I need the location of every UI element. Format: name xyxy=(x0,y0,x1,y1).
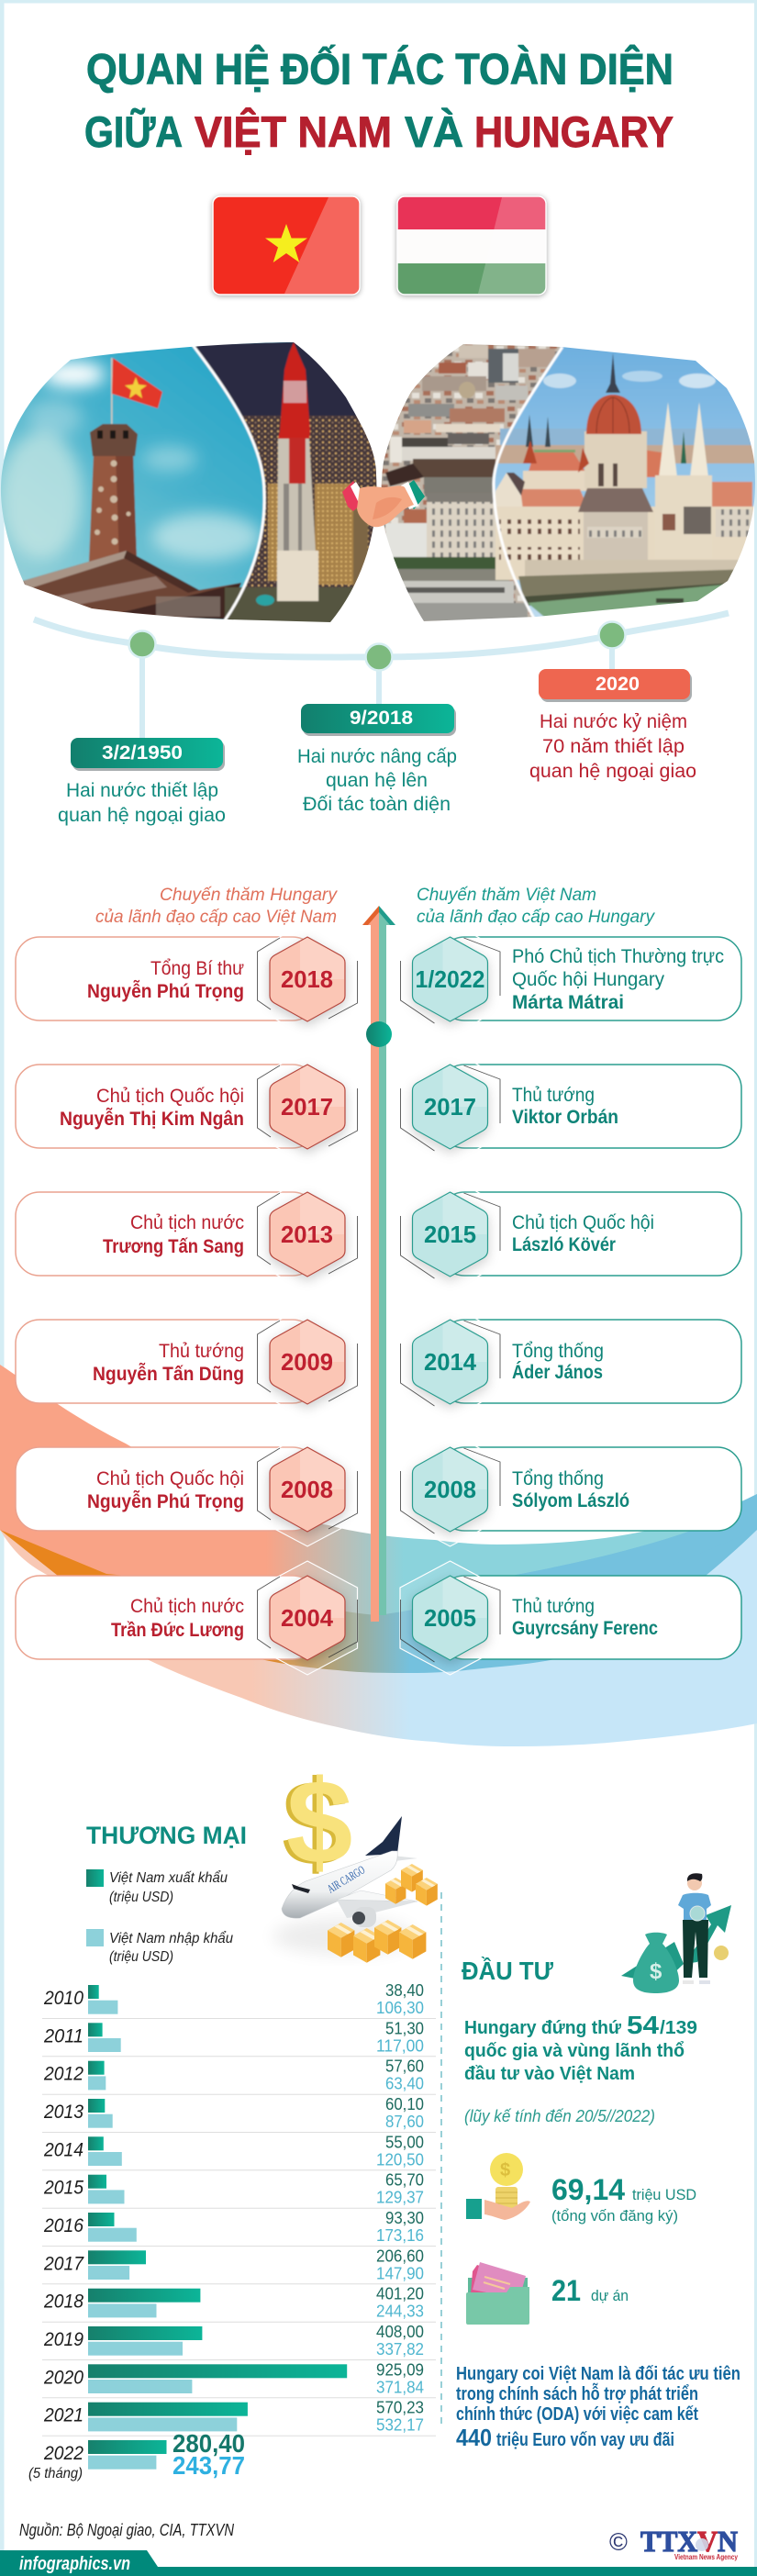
year labels xyxy=(28,1988,84,2481)
year labels: 2012 xyxy=(43,2064,83,2085)
left column heading: của lãnh đạo cấp cao Việt Nam xyxy=(95,907,337,927)
ODA text: triệu Euro vốn vay ưu đãi xyxy=(496,2430,674,2450)
visit card: Việt Nam 2009: Nguyễn Tấn Dũng xyxy=(93,1363,244,1385)
investment ranking text xyxy=(464,2011,697,2084)
export values: 401,20 xyxy=(376,2284,424,2303)
import values: 63,40 xyxy=(385,2074,424,2093)
visit card: Hungary 1/2022: Márta Mátrai xyxy=(512,992,624,1013)
year labels: 2010 xyxy=(43,1988,83,2009)
investment ranking text: 54 xyxy=(627,2011,659,2039)
year labels: 2022 xyxy=(43,2443,83,2464)
icon: dollar sign and cargo plane: $ xyxy=(282,1756,349,1890)
visit card: Việt Nam 2009: 2009 xyxy=(281,1348,333,1376)
export values: 38,40 xyxy=(385,1980,424,2000)
2022 highlighted values: 243,77 xyxy=(173,2451,245,2480)
row separators xyxy=(42,2019,436,2436)
right column heading xyxy=(417,885,655,927)
left column heading: Chuyến thăm Hungary xyxy=(160,885,338,905)
title: HUNGARY xyxy=(474,107,674,156)
right column heading: Chuyến thăm Việt Nam xyxy=(417,885,596,905)
visit card: Hungary 2017: 2017 xyxy=(424,1093,476,1121)
title: VÀ xyxy=(405,107,463,156)
milestone 9/2018: Đối tác toàn diện xyxy=(303,794,451,815)
chevron arrow axis xyxy=(362,906,395,1622)
year labels: 2020 xyxy=(43,2367,83,2388)
milestone node 2020 xyxy=(598,622,626,648)
visit card: Hungary 1/2022: Phó Chủ tịch Thường trực xyxy=(512,946,724,967)
visit card: Hungary 2005: Thủ tướng xyxy=(512,1596,595,1617)
visit card: Việt Nam 2004: Trần Đức Lương xyxy=(111,1620,244,1641)
night city xyxy=(195,342,376,622)
logo: TTXVN: © xyxy=(609,2528,628,2556)
boxes xyxy=(328,1864,438,1963)
bar chart: trade by year xyxy=(28,1980,436,2481)
stat: registered capital xyxy=(551,2173,696,2225)
background wave: dark blue right xyxy=(512,1494,757,1615)
Budapest city blocks xyxy=(381,345,555,621)
milestone 3/2/1950: quan hệ ngoại giao xyxy=(58,805,226,826)
visit card: Hungary 2014: 2014 xyxy=(424,1348,477,1376)
ODA text: chính thức (ODA) với việc cam kết xyxy=(456,2404,698,2425)
stat: registered capital: 69,14 xyxy=(551,2173,625,2206)
logo: TTXVN: Vietnam News Agency xyxy=(674,2552,738,2561)
import values xyxy=(376,1998,424,2435)
ODA text: trong chính sách hỗ trợ phát triển xyxy=(456,2382,698,2404)
footer bar xyxy=(0,2550,757,2576)
visit card: Việt Nam 2013: Chủ tịch nước xyxy=(130,1212,244,1233)
visit card: Việt Nam 2008: Nguyễn Phú Trọng xyxy=(87,1490,244,1512)
title xyxy=(84,44,674,156)
milestone 2020: quan hệ ngoại giao xyxy=(529,761,696,782)
background wave: salmon to teal band xyxy=(0,1365,757,1615)
milestone node 2018 xyxy=(365,644,393,670)
year labels: 2013 xyxy=(43,2102,83,2123)
logo: TTXVN xyxy=(609,2525,738,2561)
photo: Budapest parliament and city xyxy=(376,340,757,633)
timeline xyxy=(34,613,729,740)
milestone 2020 xyxy=(529,669,696,782)
year labels: 2014 xyxy=(43,2139,83,2160)
icon: Vietnam flag xyxy=(213,196,360,295)
visit card: Việt Nam 2004 xyxy=(16,1561,358,1675)
milestone 9/2018 xyxy=(297,704,457,815)
visit card: Việt Nam 2009: Thủ tướng xyxy=(159,1341,244,1362)
stat: registered capital: (tổng vốn đăng ký) xyxy=(551,2207,678,2225)
visit card: Việt Nam 2013: 2013 xyxy=(281,1221,333,1248)
visit card: Hungary 2008: Sólyom László xyxy=(512,1490,629,1511)
milestone 2020: 70 năm thiết lập xyxy=(542,736,685,757)
visit card: Hungary 2014 xyxy=(400,1305,741,1419)
visit card: Hungary 2005 xyxy=(400,1561,741,1675)
icon: folder xyxy=(466,2262,529,2325)
legend: Việt Nam xuất khẩu xyxy=(109,1869,228,1886)
bars exports xyxy=(88,1985,347,2454)
visit card: Hungary 2005: Guyrcsány Ferenc xyxy=(512,1618,658,1639)
export values: 60,10 xyxy=(385,2094,424,2113)
investment ranking text: đầu tư vào Việt Nam xyxy=(464,2064,635,2084)
year labels: 2016 xyxy=(43,2215,83,2236)
visit card: Việt Nam 2008: Chủ tịch Quốc hội xyxy=(96,1468,244,1489)
axis node xyxy=(366,1021,392,1047)
milestone 3/2/1950 xyxy=(58,738,226,826)
visit card: Hungary 1/2022: Quốc hội Hungary xyxy=(512,969,664,990)
year labels: 2019 xyxy=(43,2329,83,2350)
title: QUAN HỆ ĐỐI TÁC TOÀN DIỆN xyxy=(86,44,674,94)
export values: 570,23 xyxy=(376,2398,424,2417)
visit card: Việt Nam 2017: Nguyễn Thị Kim Ngân xyxy=(60,1108,244,1130)
milestone 2020: Hai nước kỷ niệm xyxy=(540,711,687,732)
legend: Việt Nam nhập khẩu xyxy=(109,1930,233,1946)
white arc divider xyxy=(193,345,264,620)
icon: dollar sign and cargo plane xyxy=(273,1755,438,1963)
export values: 55,00 xyxy=(385,2132,424,2151)
flag tower xyxy=(89,424,138,562)
export values: 57,60 xyxy=(385,2057,424,2076)
year labels: 2021 xyxy=(43,2405,83,2426)
visit card: Hungary 2015: 2015 xyxy=(424,1221,476,1248)
export values xyxy=(376,1980,424,2417)
visit card: Hungary 2014: Tổng thống xyxy=(512,1341,604,1362)
year labels: 2017 xyxy=(43,2253,84,2274)
left column heading xyxy=(95,885,338,927)
visit card: Việt Nam 2008 xyxy=(16,1433,358,1546)
visit card: Việt Nam 2004: Chủ tịch nước xyxy=(130,1596,244,1617)
visit card: Hungary 2015: Chủ tịch Quốc hội xyxy=(512,1212,654,1233)
stat: projects: 21 xyxy=(551,2274,581,2307)
icon: dollar sign and cargo plane: AIR CARGO xyxy=(325,1863,367,1896)
milestone 2020: 2020 xyxy=(596,674,640,695)
import values: 244,33 xyxy=(376,2302,424,2321)
milestone 3/2/1950: Hai nước thiết lập xyxy=(66,780,218,801)
investment ranking text: /139 xyxy=(660,2018,697,2038)
footer bar: infographics.vn xyxy=(19,2554,130,2574)
visit card: Việt Nam 2017 xyxy=(16,1050,358,1164)
legend xyxy=(86,1869,233,1965)
year labels: 2018 xyxy=(43,2292,83,2313)
visit card: Việt Nam 2004: 2004 xyxy=(281,1604,334,1632)
legend: (triệu USD) xyxy=(109,1890,173,1905)
visit card: Hungary 1/2022: 1/2022 xyxy=(415,965,484,993)
logo: TTXVN: TTXVN xyxy=(640,2525,738,2558)
title: GIỮA xyxy=(84,107,183,156)
ODA text: 440 xyxy=(456,2424,492,2451)
icon: investor with money bag xyxy=(621,1873,731,1993)
bars imports xyxy=(88,2001,237,2470)
milestone 3/2/1950: 3/2/1950 xyxy=(102,742,183,764)
clouds xyxy=(0,362,262,561)
2022 highlighted values: 280,40 xyxy=(173,2429,245,2458)
flag xyxy=(111,358,162,424)
background wave: orange to blue band xyxy=(0,1432,757,1673)
title: VIỆT NAM xyxy=(195,107,392,156)
heading: investment: ĐẦU TƯ xyxy=(462,1957,554,1985)
import values: 337,82 xyxy=(376,2339,424,2359)
export values: 51,30 xyxy=(385,2018,424,2037)
visit card: Việt Nam 2013: Trương Tấn Sang xyxy=(103,1236,244,1257)
visit card: Hungary 2017: Viktor Orbán xyxy=(512,1107,618,1128)
visit card: Việt Nam 2018: 2018 xyxy=(281,965,333,993)
visit card: Việt Nam 2018 xyxy=(16,922,358,1036)
white arc divider xyxy=(494,347,562,619)
visit card: Hungary 2017: Thủ tướng xyxy=(512,1085,595,1106)
export values: 65,70 xyxy=(385,2170,424,2190)
import values: 117,00 xyxy=(376,2035,424,2055)
icon: hand holding coin: $ xyxy=(500,2160,510,2180)
ODA text xyxy=(456,2364,740,2451)
milestone 9/2018: quan hệ lên xyxy=(326,770,428,791)
legend: (triệu USD) xyxy=(109,1949,173,1965)
export values: 206,60 xyxy=(376,2246,424,2265)
visit card: Hungary 2008 xyxy=(400,1433,741,1546)
visit card: Hungary 2017 xyxy=(400,1050,741,1164)
visit card: Hungary 2008: 2008 xyxy=(424,1476,476,1503)
year labels: 2011 xyxy=(43,2025,83,2046)
visit card: Hungary 1/2022 xyxy=(400,922,741,1036)
visit card: Việt Nam 2013 xyxy=(16,1177,358,1291)
visit card: Việt Nam 2017: 2017 xyxy=(281,1093,333,1121)
stat: projects: dự án xyxy=(591,2287,629,2304)
import values: 371,84 xyxy=(376,2377,424,2396)
visit card: Hungary 2015: László Kövér xyxy=(512,1234,616,1255)
investment ranking text: quốc gia và vùng lãnh thổ xyxy=(464,2041,685,2061)
visit card: Việt Nam 2009 xyxy=(16,1305,358,1419)
visit card: Hungary 2015 xyxy=(400,1177,741,1291)
visit card: Việt Nam 2018: Nguyễn Phú Trọng xyxy=(87,980,244,1002)
icon: investor with money bag: $ xyxy=(650,1959,662,1984)
investment ranking text: Hungary đứng thứ xyxy=(464,2018,621,2038)
heading: trade: THƯƠNG MẠI xyxy=(86,1822,247,1849)
visit card: Hungary 2008: Tổng thống xyxy=(512,1468,604,1489)
icon: handshake xyxy=(342,480,425,527)
note: (lũy kế tính đến 20/5//2022) xyxy=(464,2107,655,2125)
dashed divider xyxy=(440,1892,442,2429)
right column heading: của lãnh đạo cấp cao Hungary xyxy=(417,907,655,927)
photo: Hanoi flag tower and Landmark tower xyxy=(0,340,385,633)
background wave: pale layer xyxy=(0,1432,757,1746)
visit card: Việt Nam 2008: 2008 xyxy=(281,1476,333,1503)
year labels: (5 tháng) xyxy=(28,2466,83,2481)
import values: 87,60 xyxy=(385,2112,424,2131)
icon: Hungary flag xyxy=(397,196,546,295)
source: Nguồn: Bộ Ngoại giao, CIA, TTXVN xyxy=(19,2521,235,2539)
terrace xyxy=(18,551,241,619)
visit card: Việt Nam 2018: Tổng Bí thư xyxy=(150,958,244,979)
export values: 408,00 xyxy=(376,2322,424,2341)
import values: 173,16 xyxy=(376,2225,424,2245)
import values: 147,90 xyxy=(376,2263,424,2282)
icon: hand holding coin xyxy=(466,2153,530,2220)
export values: 925,09 xyxy=(376,2359,424,2379)
milestone 9/2018: Hai nước nâng cấp xyxy=(297,746,457,767)
parliament background xyxy=(494,344,757,624)
milestone 9/2018: 9/2018 xyxy=(350,708,413,729)
visit card: Việt Nam 2017: Chủ tịch Quốc hội xyxy=(96,1086,244,1107)
parliament building xyxy=(495,353,757,622)
year labels: 2015 xyxy=(43,2178,83,2199)
icon: dollar sign and cargo plane: $ xyxy=(286,1755,352,1889)
visit card: Hungary 2014: Áder János xyxy=(512,1362,603,1383)
visit card: Hungary 2005: 2005 xyxy=(424,1604,476,1632)
milestone node 1950 xyxy=(128,631,156,657)
2022 highlighted values xyxy=(173,2429,245,2480)
stat: registered capital: triệu USD xyxy=(632,2186,696,2203)
import values: 129,37 xyxy=(376,2188,424,2207)
stat: projects xyxy=(551,2274,629,2307)
import values: 532,17 xyxy=(376,2415,424,2435)
export values: 93,30 xyxy=(385,2208,424,2227)
import values: 106,30 xyxy=(376,1998,424,2017)
import values: 120,50 xyxy=(376,2149,424,2169)
